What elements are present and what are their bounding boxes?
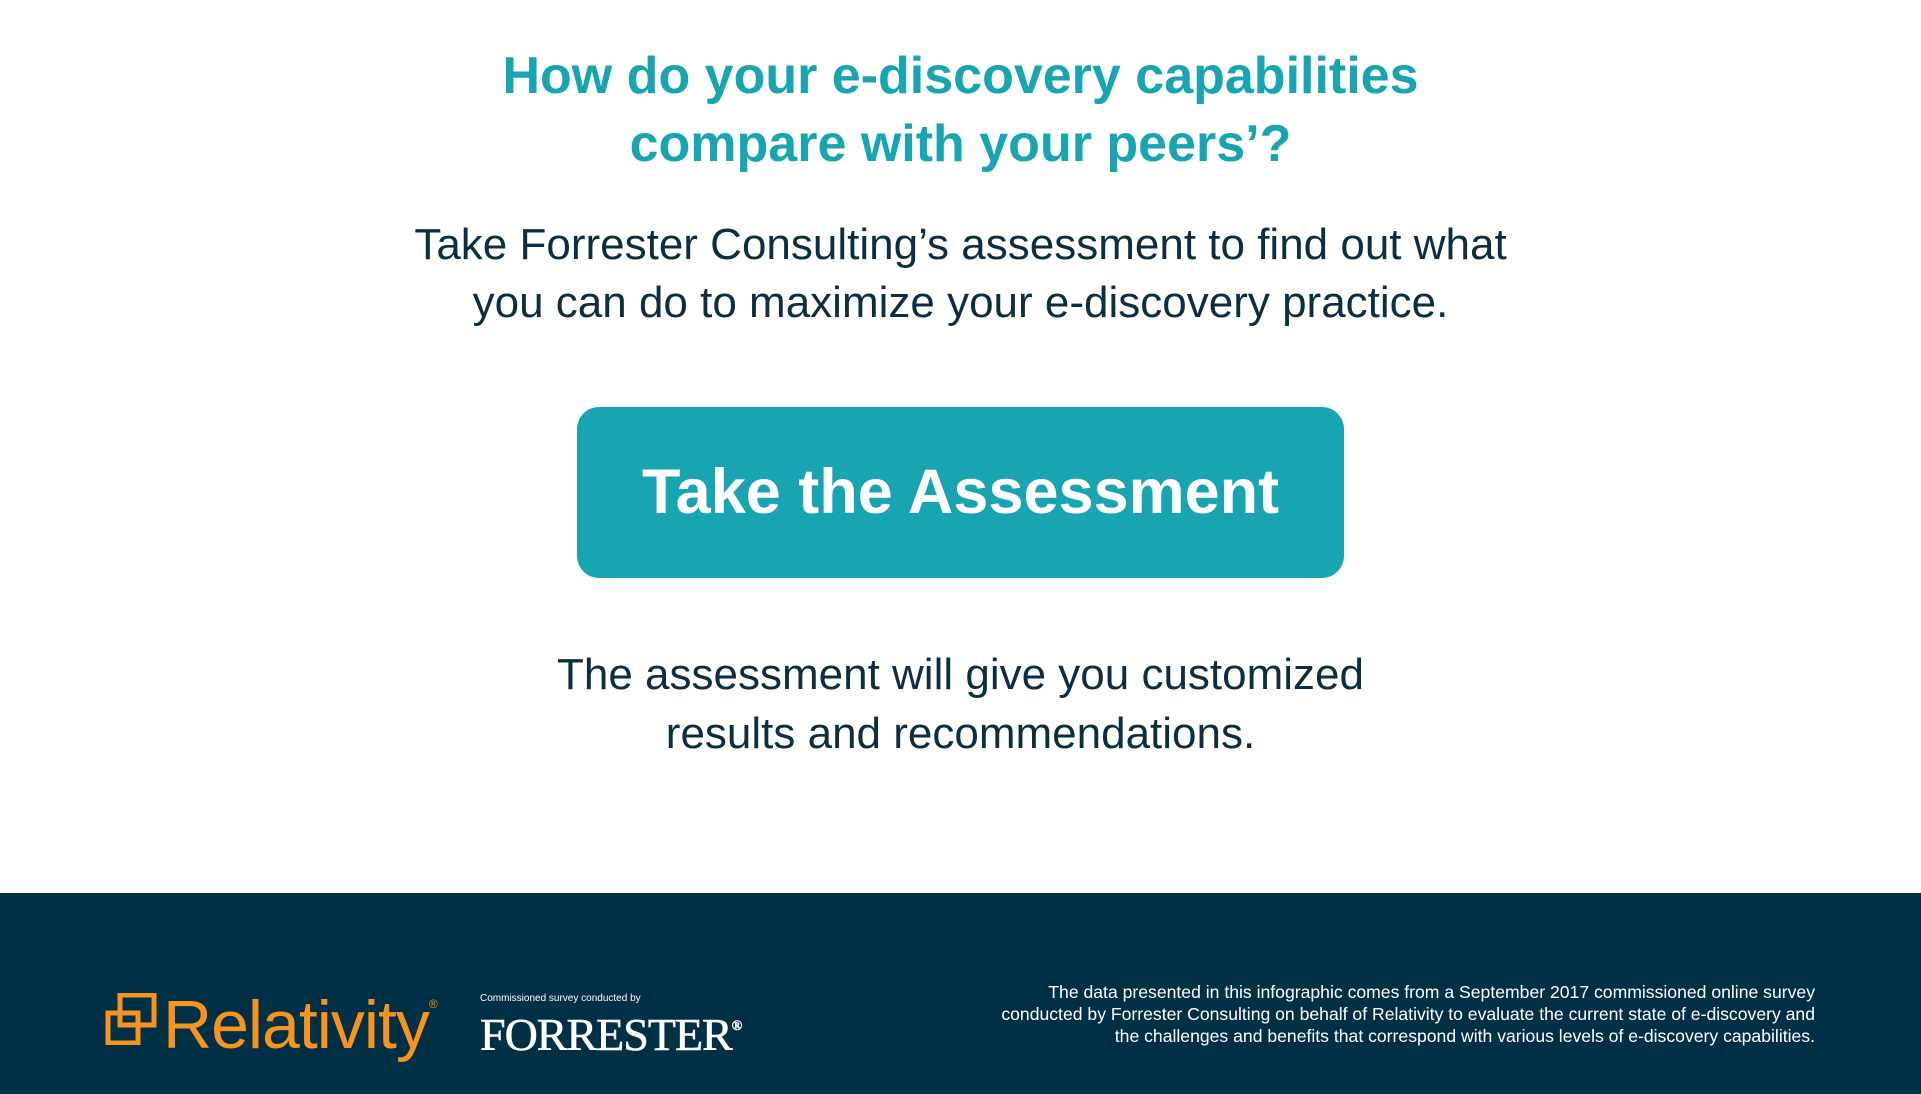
logo: forrester: Commissioned survey conducted by [480, 993, 641, 1004]
title [502, 47, 1419, 173]
icon: overlapping squares [106, 993, 156, 1045]
source note: The data presented in this infographic comes from a September 2017 commissioned online survey [1048, 982, 1815, 1002]
intro text: Take Forrester Consulting’s assessment to find out what [414, 220, 1507, 269]
title: compare with your peers’? [630, 115, 1291, 173]
closing text: results and recommendations. [666, 709, 1255, 758]
footer [0, 893, 1921, 1094]
button: take the assessment [577, 407, 1344, 578]
wordmark: Relativity® [163, 987, 437, 1063]
button: take the assessment: Take the Assessment [642, 457, 1279, 527]
title: How do your e-discovery capabilities [502, 47, 1419, 105]
closing text [557, 650, 1364, 758]
intro text: you can do to maximize your e-discovery practice. [473, 278, 1448, 327]
source note: the challenges and benefits that correspond with various levels of e-discovery capabilities. [1115, 1026, 1815, 1046]
source note: conducted by Forrester Consulting on behalf of Relativity to evaluate the current state of e-discovery and [1001, 1004, 1815, 1024]
logo: relativity [106, 987, 438, 1063]
closing text: The assessment will give you customized [557, 650, 1364, 699]
source note [1001, 982, 1815, 1046]
intro text [414, 220, 1507, 327]
logo: forrester: FORRESTER® [480, 1009, 741, 1060]
